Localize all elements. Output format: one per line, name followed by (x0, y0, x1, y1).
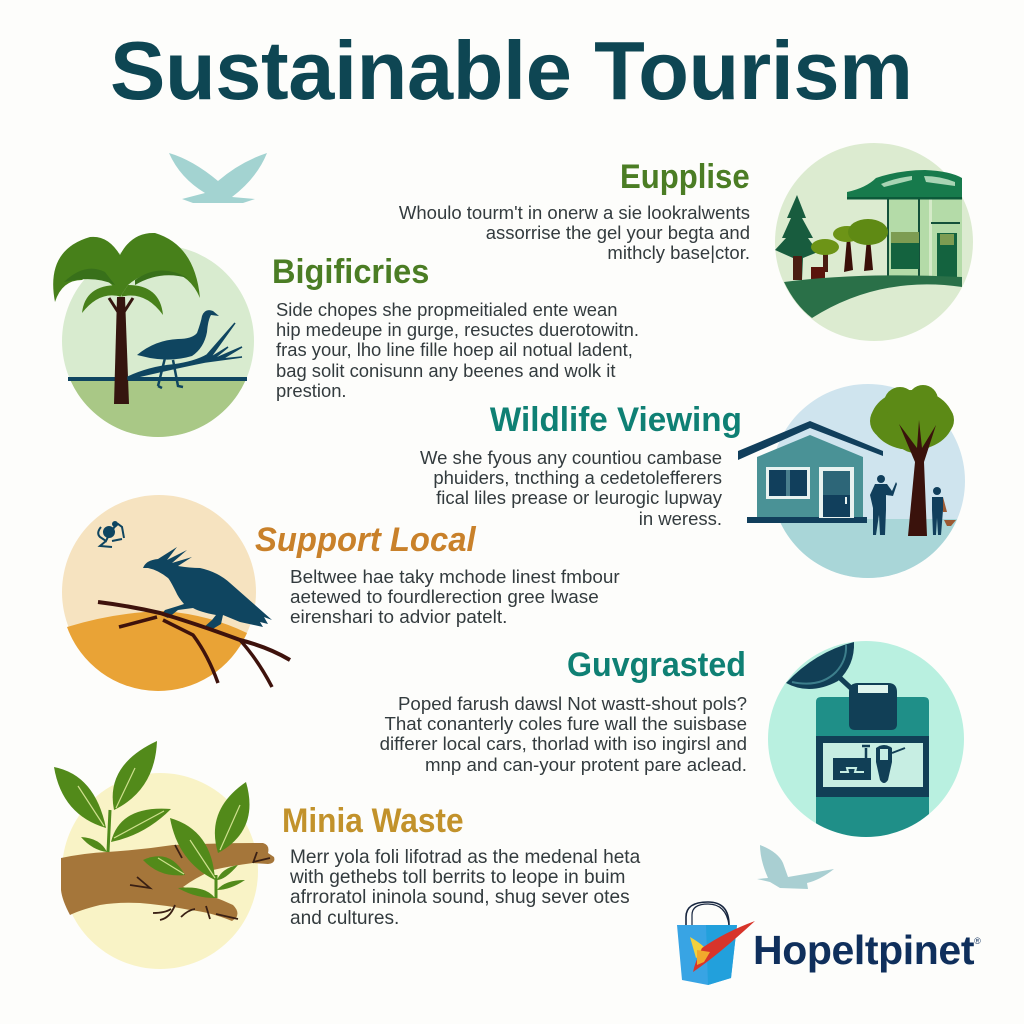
text block: Bigificries: Side chopes she propmeitialed ente wean (276, 299, 617, 320)
title: Sustainable Tourism (110, 24, 913, 117)
bird (143, 547, 272, 630)
text block: Eupplise: Whoulo tourm't in onerw a sie lookralwents (399, 202, 750, 223)
branches (98, 602, 290, 660)
text block: Support Local: aetewed to fourdlerection gree lwase (290, 587, 599, 608)
heading: Wildlife Viewing: Wildlife Viewing (490, 401, 742, 439)
log (61, 843, 274, 921)
text block: Minia Waste (290, 847, 640, 929)
text block: Guvgrasted: mnp and can-your protent pare aclead. (425, 754, 747, 775)
text block: Wildlife Viewing: fical liles prease or leurogic lupway (436, 487, 722, 508)
ground (784, 275, 962, 318)
text block: Minia Waste: and cultures. (290, 908, 399, 929)
trees (775, 195, 888, 286)
text block: Guvgrasted (380, 693, 747, 775)
text block: Minia Waste: Merr yola foli lifotrad as the medenal heta (290, 847, 640, 868)
icon: palm and bird circle (53, 233, 256, 440)
bird on branch (128, 310, 242, 388)
text block: Guvgrasted: Poped farush dawsl Not wastt-shout pols? (398, 693, 747, 714)
text block: Support Local: eirenshari to advior patelt. (290, 607, 507, 628)
icon: eco lodge circle (775, 143, 973, 341)
leaves right plant (143, 782, 250, 898)
text block: Bigificries: bag solit conisunn any beenes and wolk it (276, 360, 615, 381)
icon: backpack circle (768, 641, 964, 840)
text block: Minia Waste: afrroratol ininola sound, shug sever otes (290, 887, 630, 908)
heading: Guvgrasted: Guvgrasted (567, 646, 746, 684)
icon: house and tree circle (738, 384, 970, 581)
text block: Bigificries: fras your, lho line fille hoep ail notual ladent, (276, 339, 633, 360)
tree (870, 385, 954, 536)
text block: Eupplise: assorrise the gel your begta and (486, 222, 750, 243)
text block: Wildlife Viewing (420, 447, 722, 529)
house (738, 421, 883, 523)
text block: Bigificries (276, 299, 639, 401)
icon: shopping bag logo (677, 902, 755, 985)
text block: Wildlife Viewing: We she fyous any countiou cambase (420, 447, 722, 468)
heading: Eupplise: Eupplise (620, 158, 750, 196)
text block: Bigificries: prestion. (276, 380, 347, 401)
text block: Support Local (290, 567, 620, 628)
text block: Guvgrasted: differer local cars, thorlad with iso ingirsl and (380, 733, 747, 754)
text block: Guvgrasted: That conanterly coles fure wall the suisbase (384, 713, 747, 734)
logo wordmark: Hopeltpinet® (753, 927, 980, 973)
icon: seedling circle (54, 741, 274, 969)
icon: perched bird circle (62, 495, 290, 691)
text block: Eupplise: mithcly base|ctor. (607, 242, 750, 263)
heading: Support Local: Support Local (255, 521, 476, 559)
text block: Bigificries: hip medeupe in gurge, resuctes duerotowitn. (276, 319, 639, 340)
illustrations (53, 143, 973, 985)
small animal (98, 524, 124, 547)
people (870, 475, 956, 535)
text block: Wildlife Viewing: phuiders, tncthing a cedetolefferers (433, 467, 722, 488)
icon: bird bottom right (757, 845, 834, 889)
text block: Eupplise (399, 202, 750, 263)
heading: Minia Waste: Minia Waste (282, 802, 464, 840)
icon: bird top left (169, 153, 267, 203)
palm tree (53, 233, 200, 404)
building (847, 170, 962, 277)
text block: Wildlife Viewing: in weress. (639, 508, 722, 529)
text block: Minia Waste: with gethebs toll berrits to leope in buim (290, 867, 625, 888)
text block: Support Local: Beltwee hae taky mchode linest fmbour (290, 567, 620, 588)
leaves left plant (54, 741, 171, 852)
heading: Bigificries: Bigificries (272, 253, 429, 291)
